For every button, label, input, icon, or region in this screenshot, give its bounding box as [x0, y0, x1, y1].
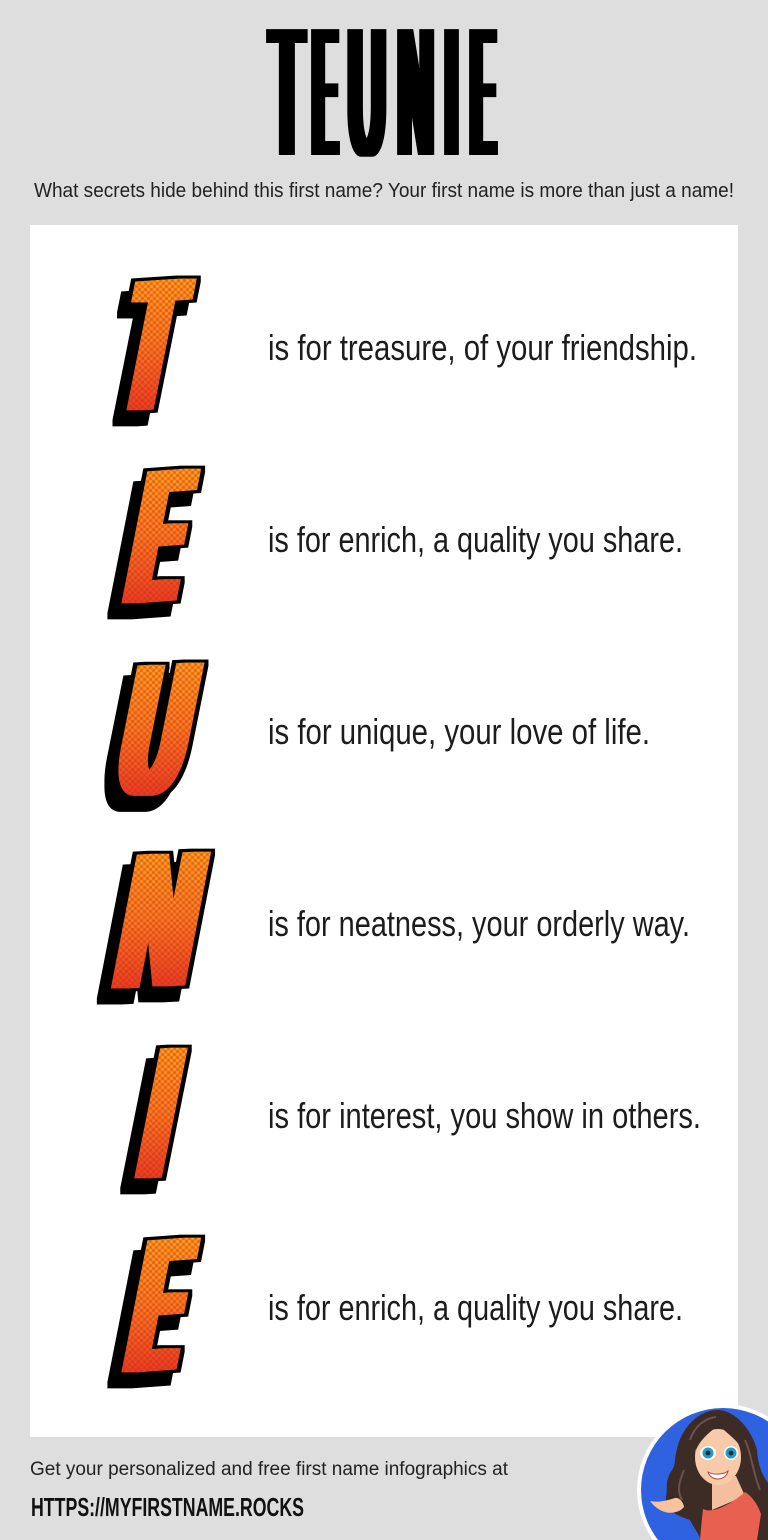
- row 6: letter E: [116, 1197, 683, 1414]
- icon: comic letter U: U: [106, 621, 210, 836]
- title: [270, 0, 494, 195]
- row 2: letter E: [116, 428, 683, 645]
- footer url: HTTPS://MYFIRSTNAME.ROCKS: [31, 1492, 304, 1522]
- panel: letter meanings: [30, 225, 738, 1437]
- icon: comic letter I: I: [129, 1007, 193, 1220]
- icon: comic letter T: T: [108, 239, 198, 453]
- row 3: letter U: [106, 621, 650, 836]
- row 5: letter I: [129, 1007, 701, 1220]
- text: U meaning: is for unique, your love of life.: [268, 711, 650, 752]
- icon: comic letter E: E: [116, 1197, 205, 1414]
- icon: comic letter E: E: [116, 428, 205, 645]
- icon: comic letter N: N: [104, 810, 218, 1031]
- footer call to action: Get your personalized and free first name infographics at: [30, 1459, 509, 1480]
- row 1: letter T: [108, 239, 697, 453]
- icon: avatar of a smiling woman: [637, 1404, 768, 1540]
- subtitle: What secrets hide behind this first name? Your first name is more than just a name!: [34, 180, 734, 202]
- row 4: letter N: [104, 810, 690, 1031]
- panel background: [30, 225, 738, 1437]
